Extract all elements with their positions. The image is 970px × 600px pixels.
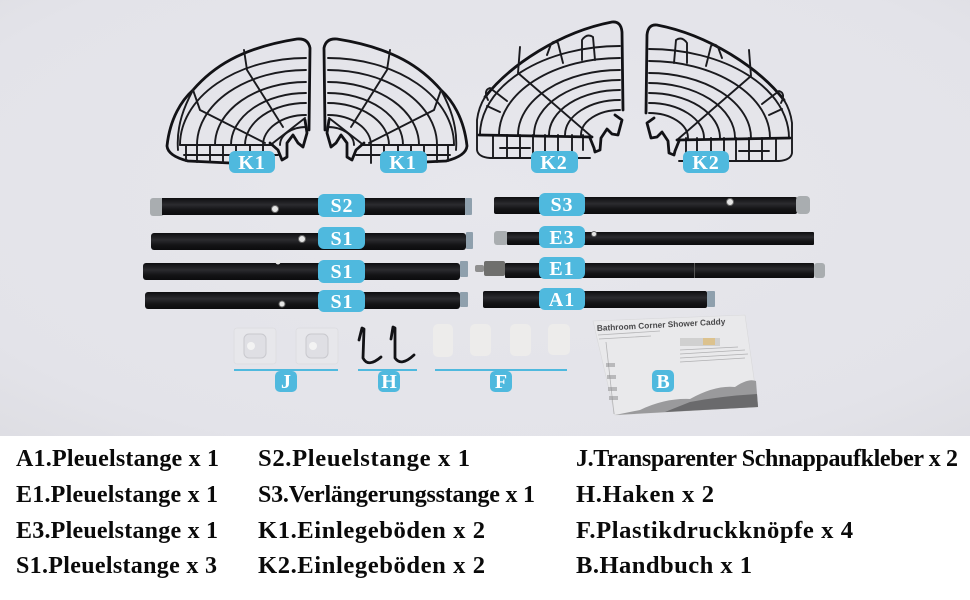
label E1	[539, 257, 585, 280]
label S3: S3	[550, 194, 574, 216]
parts list column 1: E1.Pleuelstange x 1	[16, 482, 218, 508]
parts list column 3	[576, 446, 958, 579]
label S1: S1	[330, 261, 354, 283]
label K2	[531, 151, 578, 174]
manual title: Bathroom Corner Shower Caddy	[597, 316, 726, 333]
label J: J	[281, 371, 291, 393]
rod E3	[494, 226, 814, 249]
adhesive hooks J	[234, 328, 338, 393]
label K1	[380, 151, 427, 174]
shelf K2 left	[477, 22, 623, 174]
shelf K2 right	[646, 25, 792, 174]
shelf K1 right	[324, 39, 467, 174]
parts list column 1: A1.Pleuelstange x 1	[16, 446, 219, 472]
parts list column 3: H.Haken x 2	[576, 481, 714, 508]
photo background	[0, 0, 970, 436]
parts list column 3: J.Transparenter Schnappaufkleber x 2	[576, 446, 958, 472]
label K2: K2	[540, 152, 568, 174]
parts list column 2: S3.Verlängerungsstange x 1	[258, 482, 535, 508]
label K1: K1	[238, 152, 266, 174]
label A1	[539, 288, 585, 311]
parts list column 3: B.Handbuch x 1	[576, 552, 752, 579]
label B: B	[656, 371, 670, 393]
parts list column 3: F.Plastikdruckknöpfe x 4	[576, 517, 853, 544]
label K1: K1	[389, 152, 417, 174]
rod S1 upper	[151, 227, 473, 250]
label S2: S2	[330, 195, 354, 217]
label K2	[683, 151, 729, 174]
rod S2	[150, 194, 472, 217]
label S1	[318, 290, 365, 313]
rod S3	[494, 193, 810, 216]
label S3	[539, 193, 585, 216]
label H: H	[381, 371, 397, 393]
parts list column 2: K2.Einlegeböden x 2	[258, 552, 485, 579]
label K2: K2	[692, 152, 720, 174]
label S2	[318, 194, 365, 217]
label F: F	[495, 371, 507, 393]
rod A1	[483, 288, 715, 311]
label S1: S1	[330, 291, 354, 313]
parts list column 1: S1.Pleuelstange x 3	[16, 553, 217, 579]
parts list column 1	[16, 446, 219, 579]
label K1	[229, 151, 275, 174]
parts list column 2	[258, 445, 535, 579]
plastic caps F	[433, 324, 570, 393]
label E3	[539, 226, 585, 249]
parts list column 2: S2.Pleuelstange x 1	[258, 445, 470, 472]
label S1	[318, 260, 365, 283]
label A1: A1	[549, 289, 575, 311]
label B	[652, 370, 674, 393]
shelf K1 left	[167, 39, 310, 174]
parts list column 2: K1.Einlegeböden x 2	[258, 517, 485, 544]
label E3: E3	[549, 227, 575, 249]
parts list column 1: E3.Pleuelstange x 1	[16, 518, 218, 544]
rod S1 lower	[145, 290, 468, 313]
rod E1	[475, 257, 825, 280]
label S1: S1	[330, 228, 354, 250]
hooks H	[358, 327, 417, 393]
label E1: E1	[549, 258, 575, 280]
label S1	[318, 227, 365, 250]
rod S1 middle	[143, 260, 468, 283]
manual B	[593, 315, 758, 415]
